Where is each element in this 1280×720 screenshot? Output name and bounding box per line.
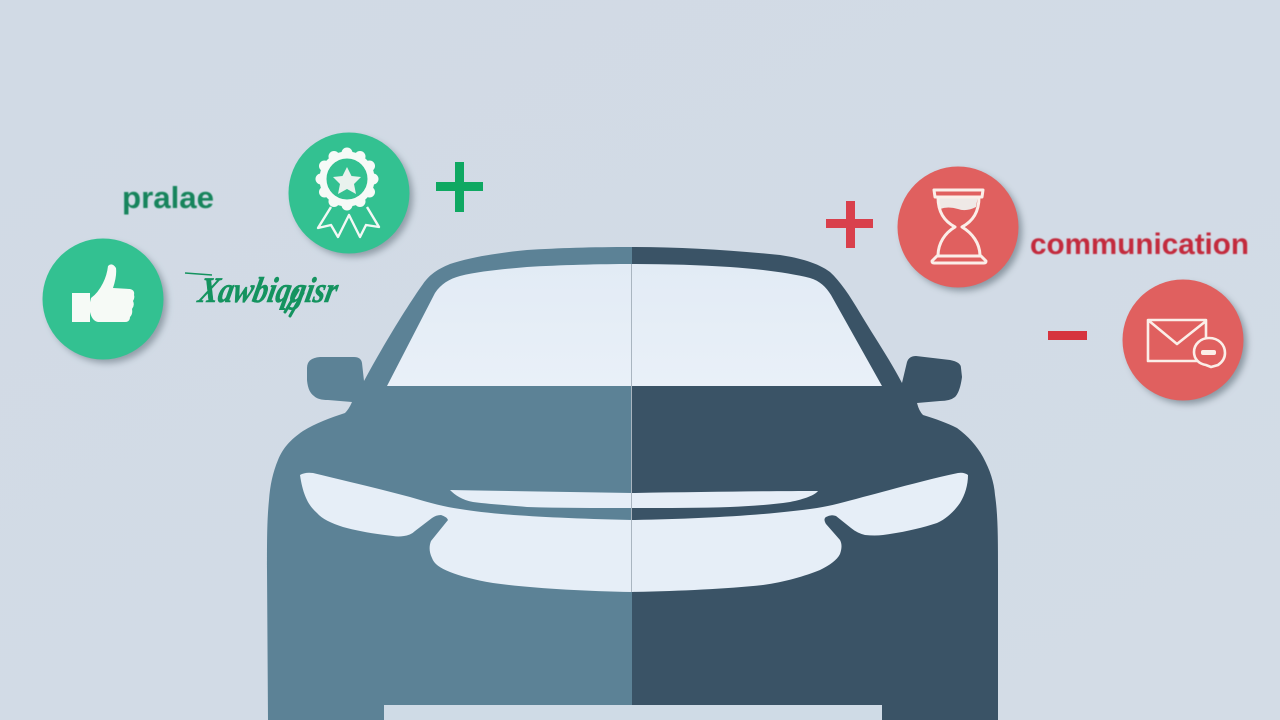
badge: thumbs up	[42, 238, 167, 363]
icon: hourglass sand top	[938, 196, 978, 210]
icon: thumbs up hand	[72, 264, 134, 322]
icon: envelope	[1148, 320, 1206, 361]
icon: scalloped medal ring	[316, 148, 378, 210]
label: pralae: pralae	[122, 180, 214, 215]
badge: award rosette	[288, 132, 413, 257]
icon: ribbon tails	[318, 207, 379, 237]
bottom licence plate bar	[384, 705, 882, 720]
icon: star	[333, 167, 361, 194]
car body: right half	[632, 247, 998, 720]
windshield	[387, 264, 882, 386]
left headlight and lower bumper opening	[300, 473, 632, 592]
icon: hourglass outline	[932, 190, 986, 263]
car body: left half	[267, 247, 632, 720]
icon: minus speech bubble	[1194, 338, 1225, 367]
label: scribbled green text: Xawbiqgisr	[195, 270, 342, 310]
badge: envelope with message	[1122, 280, 1247, 404]
plus sign: green	[436, 162, 483, 212]
minus sign: red	[1048, 331, 1087, 340]
right headlight and lower bumper opening	[632, 473, 968, 592]
plus sign: red	[826, 201, 873, 248]
car front illustration	[267, 247, 998, 720]
label: scribbled green text	[185, 270, 342, 316]
badge: hourglass	[898, 166, 1022, 291]
label: communication: communication	[1030, 228, 1249, 261]
grille light strip	[450, 490, 818, 508]
centre dividing line	[630, 264, 632, 592]
